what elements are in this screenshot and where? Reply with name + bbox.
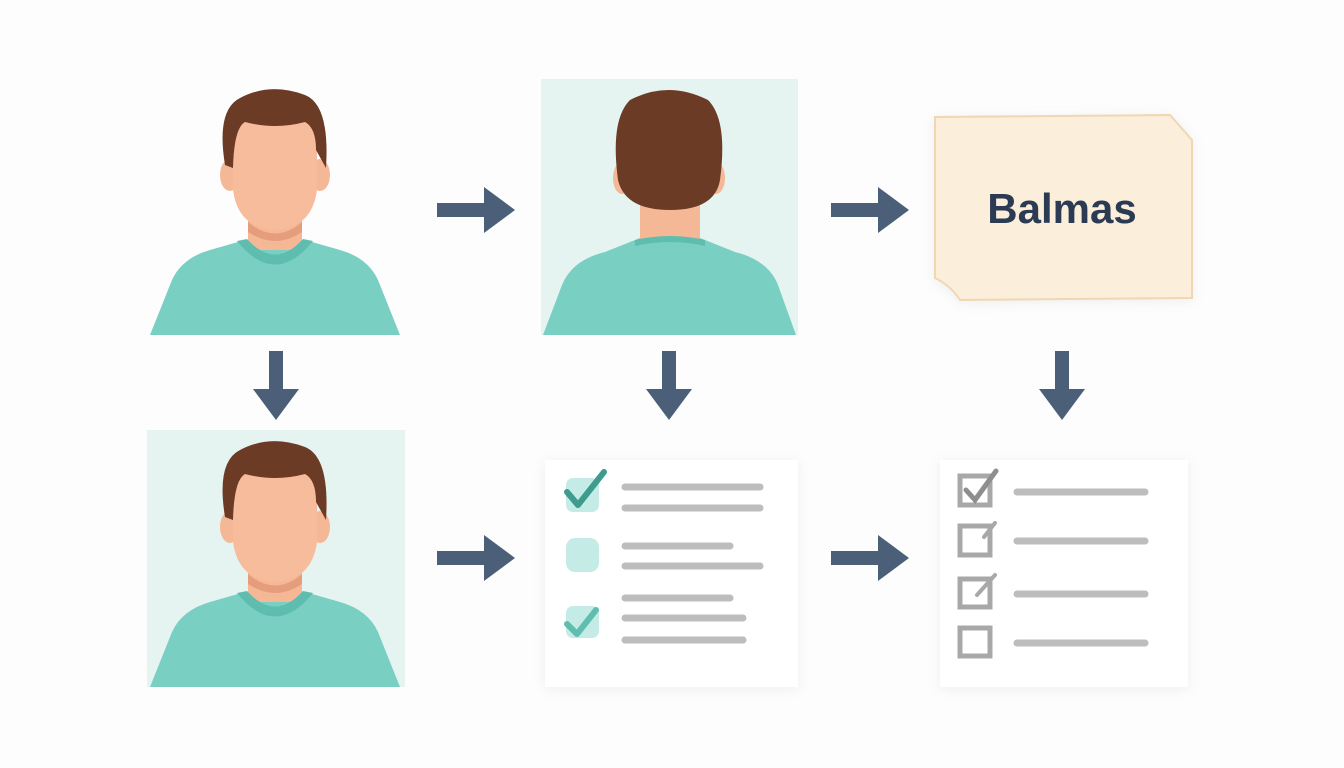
arrow: right 3 — [437, 535, 515, 581]
arrow: down 3 — [1039, 351, 1085, 420]
arrow: down 2 — [646, 351, 692, 420]
panel: back portrait — [541, 79, 798, 335]
arrow: right 4 — [831, 535, 909, 581]
panel: checklist teal — [545, 460, 798, 687]
panel: front portrait — [150, 89, 400, 335]
arrow: right 1 — [437, 187, 515, 233]
arrow: down 1 — [253, 351, 299, 420]
arrow: right 2 — [831, 187, 909, 233]
panel: note Balmas — [935, 115, 1192, 300]
panel: checklist gray — [940, 460, 1188, 687]
text: Balmas: Balmas — [987, 185, 1137, 232]
panel: front portrait with background — [147, 430, 405, 687]
